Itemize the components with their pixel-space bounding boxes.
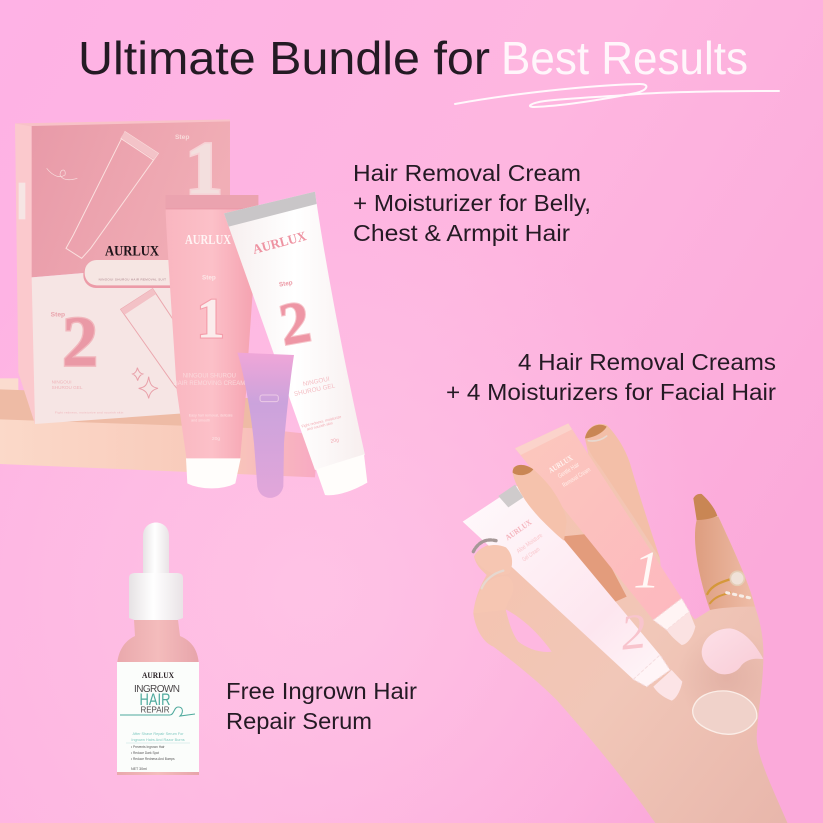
pink tube step 1: HAIR REMOVING CREAM <box>173 381 245 387</box>
finger shadow between tubes <box>560 533 627 610</box>
brand on box: AURLUX <box>105 243 160 259</box>
white tube step 2: 20g <box>330 437 340 445</box>
spatula <box>237 353 294 498</box>
pink mini tube: AURLUX <box>547 453 574 475</box>
product pill <box>83 260 185 288</box>
white mini tube: 2 <box>618 602 649 661</box>
serum label: • Reduce Redness And Bumps <box>131 757 175 761</box>
pink tube step 1: AURLUX <box>185 232 231 247</box>
pink mini tube: Gentle Hair <box>557 461 581 480</box>
serum label: After Shave Repair Serum For <box>132 732 184 736</box>
hand holding mini tubes <box>463 423 788 823</box>
pink mini tube: 1 <box>633 539 660 599</box>
white tube step 2: and nourish skin <box>306 421 333 432</box>
underline swoosh <box>455 84 779 107</box>
text: facial hair creams: 4 Hair Removal Creams <box>518 349 776 375</box>
serum label: AURLUX <box>142 670 175 680</box>
serum label: INGROWN <box>134 684 180 695</box>
dropper bulb <box>143 522 169 580</box>
text: hair removal cream <box>353 160 591 246</box>
pink mini tube: Removal Cream <box>561 466 592 489</box>
gap between fingers <box>506 609 552 652</box>
pink tube step 1: 1 <box>197 288 225 350</box>
fingertips over tubes <box>473 424 660 613</box>
product set: box, tubes and spatula <box>0 119 367 498</box>
text: hair removal cream: Hair Removal Cream <box>353 160 581 186</box>
white tube step 2: Step <box>278 279 293 289</box>
white tube step 2 <box>224 192 367 495</box>
title <box>78 32 748 84</box>
step 2 numeral on box <box>51 302 124 414</box>
pink tube step 1: NINGOUI SHUROU <box>183 373 236 379</box>
text: free serum <box>226 678 417 734</box>
box <box>15 119 230 424</box>
text: free serum: Free Ingrown Hair <box>226 678 417 704</box>
serum label <box>117 662 199 772</box>
white tube step 2: NINGOUI <box>302 376 331 388</box>
step 1 numeral on box: Step <box>175 134 189 141</box>
palm shading <box>702 663 748 694</box>
serum label: • Prevents Ingrown Hair <box>131 745 165 749</box>
white mini tube: Aloe Moisture <box>515 532 544 555</box>
white mini tube: Gel Cream <box>521 546 542 563</box>
serum label: REPAIR <box>140 706 170 714</box>
text: facial hair creams <box>446 349 776 405</box>
serum label: Ingrown Hairs And Razor Burns <box>131 738 185 742</box>
serum label: HAIR <box>140 690 170 709</box>
hand base <box>473 424 788 823</box>
text: hair removal cream: Chest & Armpit Hair <box>353 220 570 246</box>
step 2 numeral on box: SHUROU GEL <box>52 385 83 390</box>
pink mini tube <box>515 423 695 645</box>
serum label: NET 30ml <box>131 767 147 771</box>
white tube step 2: 2 <box>274 288 315 358</box>
dropper collar <box>129 573 183 622</box>
platform <box>0 378 318 477</box>
glass bottle <box>117 620 199 775</box>
clear gel swatch <box>693 691 757 734</box>
step 2 numeral on box: Step <box>51 312 65 319</box>
serum bottle <box>117 522 199 775</box>
pink tube step 1: 20g <box>212 436 220 442</box>
white tube step 2: AURLUX <box>251 228 308 257</box>
step 2 numeral on box: 2 <box>62 302 98 382</box>
white mini tube: AURLUX <box>504 518 534 542</box>
rings <box>473 436 753 603</box>
pink tube step 1 <box>166 195 258 488</box>
pink tube step 1: and smooth <box>191 418 210 422</box>
title: Ultimate Bundle for <box>78 32 490 84</box>
step 2 numeral on box: NINGOUI <box>52 379 72 384</box>
text: facial hair creams: + 4 Moisturizers for Facial Hair <box>446 379 776 405</box>
white mini tube <box>463 485 682 701</box>
line art tube <box>66 132 158 258</box>
white tube step 2: Fight redness, moisturize <box>301 415 342 429</box>
step 2 numeral on box: Fight redness, moisturize and nourish skin <box>55 410 124 414</box>
pink cream swatch <box>702 628 763 674</box>
thumb <box>695 517 755 610</box>
text: hair removal cream: + Moisturizer for Belly, <box>353 190 591 216</box>
title: Best Results <box>501 32 748 84</box>
pink tube step 1: Step <box>202 274 216 281</box>
step 1 numeral on box: 1 <box>185 127 223 210</box>
white tube step 2: SHUROU GEL <box>293 382 336 398</box>
text: free serum: Repair Serum <box>226 708 372 734</box>
nails <box>513 425 717 520</box>
serum label: • Reduce Dark Spot <box>131 751 159 755</box>
pink tube step 1: Easy hair removal, delicate <box>189 414 233 418</box>
product pill: NINGOUI SHUROU HAIR REMOVAL SUIT <box>99 277 166 281</box>
